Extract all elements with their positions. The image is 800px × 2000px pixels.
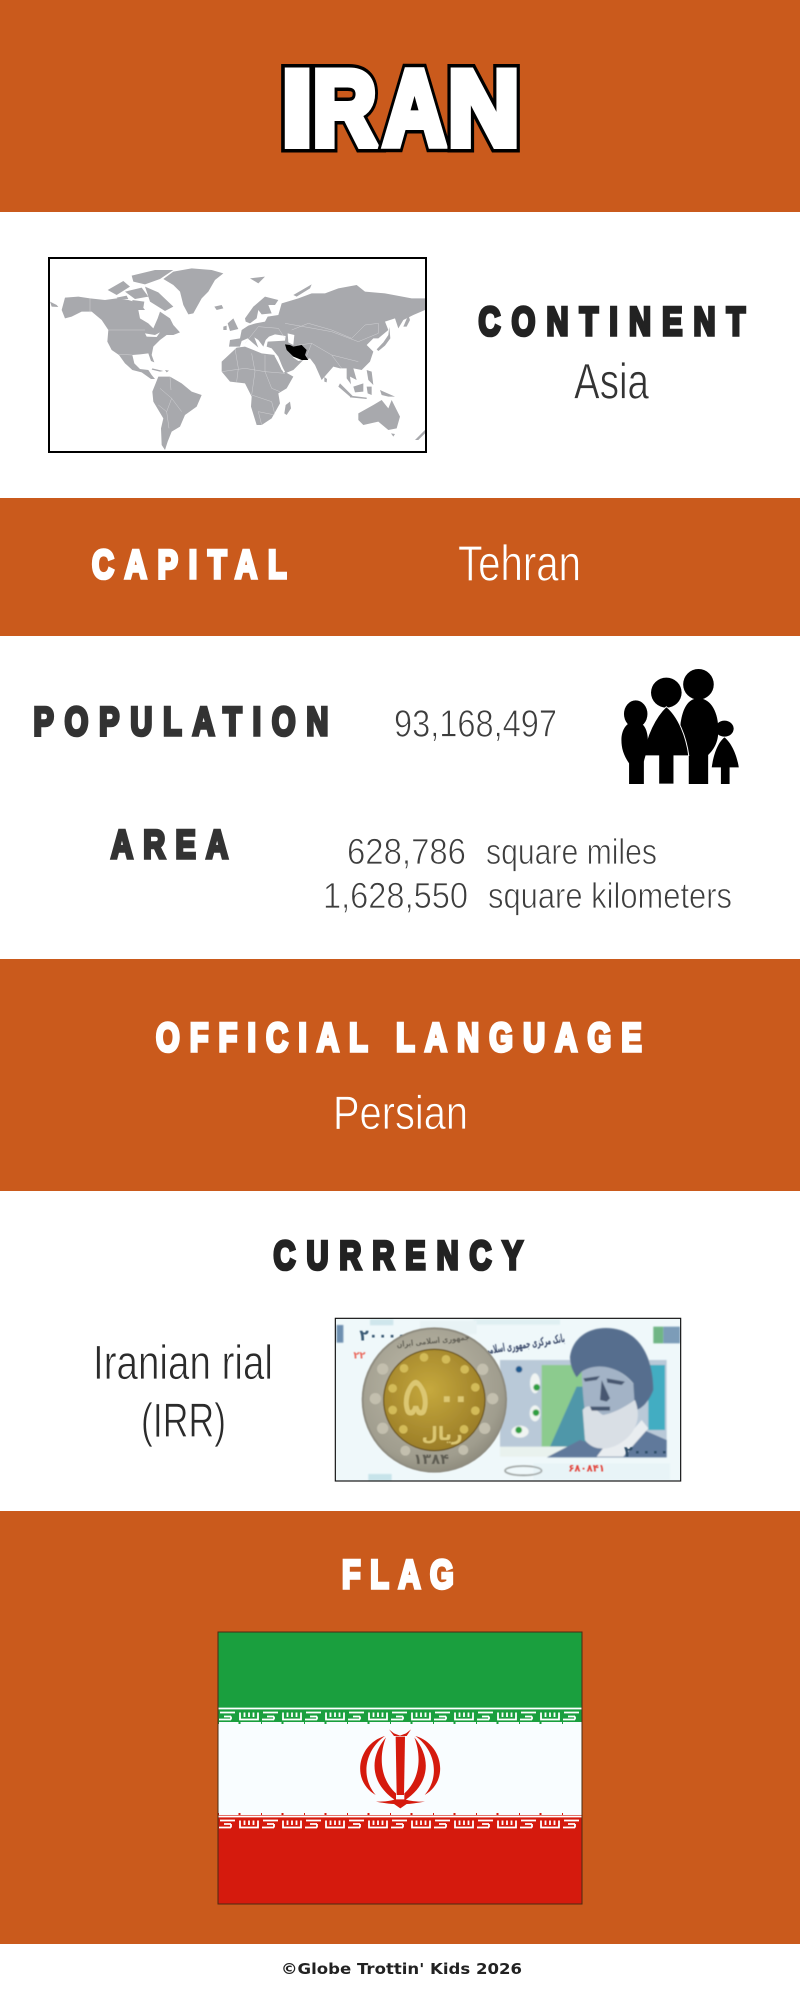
world map with Iran highlighted	[49, 258, 426, 452]
title: N	[448, 48, 520, 168]
capital value: Tehran	[458, 536, 581, 592]
flag heading: FLAG	[342, 1552, 454, 1597]
title: A	[383, 48, 446, 168]
red stripe	[218, 1830, 582, 1904]
banknote lettering	[353, 1327, 669, 1475]
banknote lettering: ۲۰۰۰۰	[624, 1444, 669, 1461]
continent heading: CONTINENT	[478, 299, 746, 344]
coin	[362, 1327, 507, 1473]
title: R	[312, 48, 377, 168]
area heading: AREA	[111, 822, 228, 867]
red kufic band	[218, 1812, 582, 1830]
official language heading: OFFICIAL LANGUAGE	[156, 1015, 642, 1060]
currency value: Iranian rial	[93, 1337, 273, 1390]
coin: جمهوری اسلامی ایران	[396, 1333, 470, 1349]
coin: ۰	[437, 1377, 457, 1416]
title: N	[448, 48, 520, 168]
flag of Iran	[218, 1632, 582, 1904]
landmasses	[50, 268, 425, 450]
area values: 1,628,550	[323, 875, 468, 916]
coin: ۱۳۸۴	[413, 1451, 449, 1468]
coin: ۰	[451, 1377, 471, 1416]
banknote lettering: ۶۸۰۸۴۱	[568, 1464, 605, 1475]
inland water	[145, 332, 303, 361]
population value: 93,168,497	[394, 704, 557, 746]
area values: 628,786	[347, 831, 466, 872]
currency heading: CURRENCY	[274, 1233, 523, 1278]
title: I	[282, 49, 313, 168]
continent value: Asia	[574, 354, 649, 410]
coin: ریال	[422, 1424, 463, 1445]
capital band	[0, 498, 800, 636]
currency value	[93, 1337, 273, 1448]
banknote	[337, 1319, 680, 1481]
coin: ۵	[401, 1364, 431, 1428]
icon: family silhouette	[621, 669, 739, 784]
title: I	[282, 49, 313, 168]
emblem	[360, 1729, 440, 1808]
area values: square kilometers	[488, 875, 732, 916]
title: R	[312, 48, 377, 168]
country borders	[90, 298, 378, 428]
currency value: (IRR)	[141, 1395, 226, 1448]
official language value: Persian	[333, 1086, 468, 1139]
green stripe	[218, 1632, 582, 1708]
banknote lettering: ۲۲	[353, 1350, 366, 1361]
area values	[323, 831, 732, 916]
header band	[0, 0, 800, 212]
Iran	[285, 344, 308, 360]
title: A	[383, 48, 446, 168]
banknote lettering: ۲۰۰۰۰	[359, 1327, 406, 1345]
flag band	[0, 1511, 800, 1944]
capital heading: CAPITAL	[92, 542, 287, 587]
banknote and coin photo	[335, 1318, 681, 1481]
title	[282, 48, 520, 168]
green kufic band	[218, 1707, 582, 1725]
banknote lettering: بانک مرکزی جمهوری اسلامی	[483, 1331, 566, 1357]
population heading: POPULATION	[34, 699, 328, 744]
area values: square miles	[486, 831, 657, 872]
footer credit: ©Globe Trottin' Kids 2026	[281, 1960, 522, 1978]
official language band	[0, 959, 800, 1191]
